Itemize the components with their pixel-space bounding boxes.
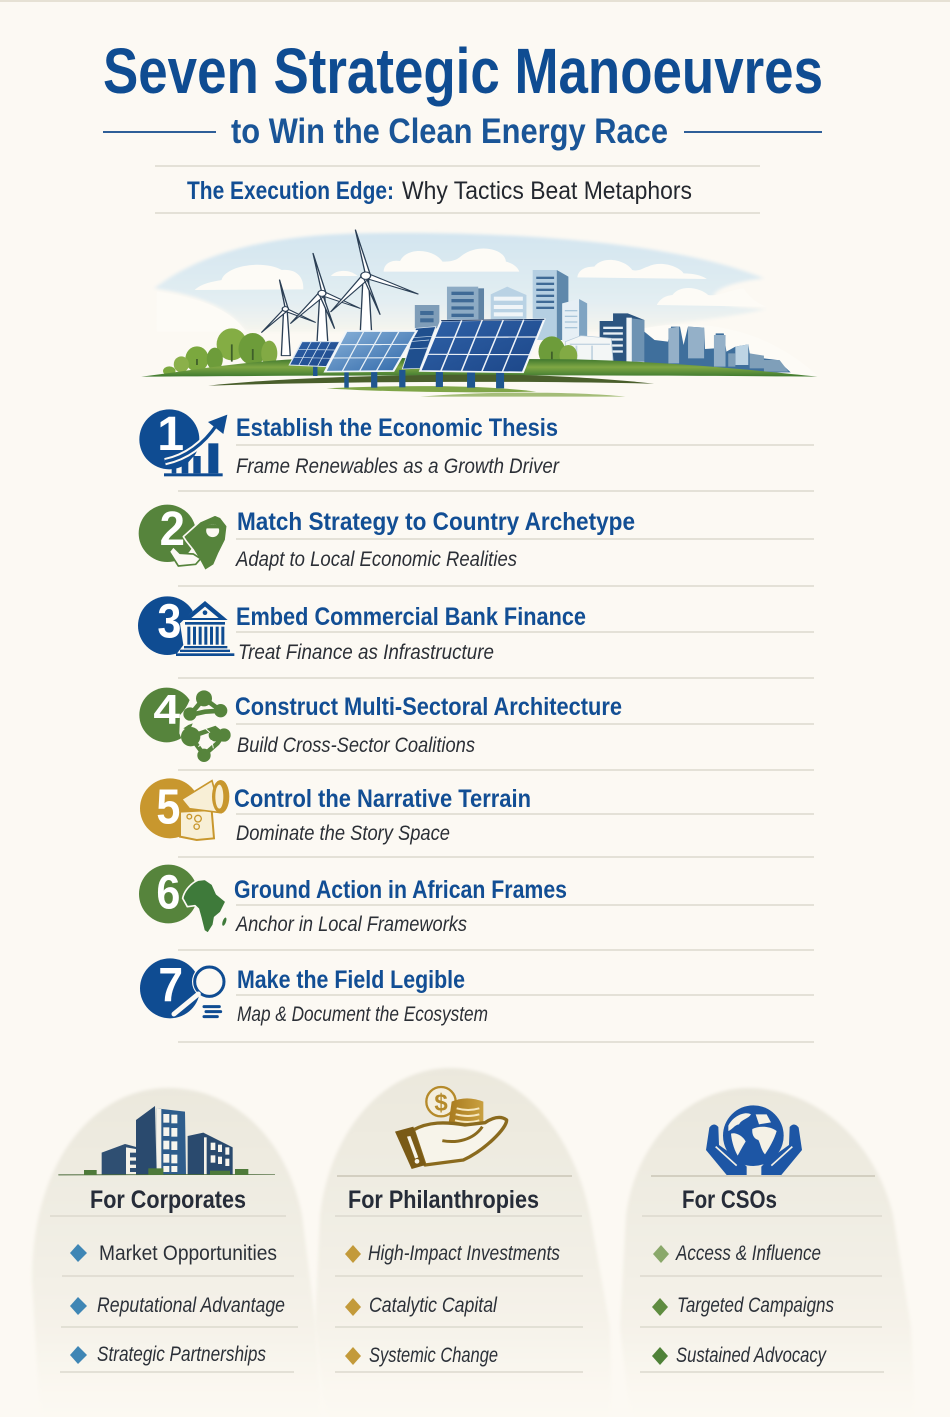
subheading 6: Anchor in Local Frameworks	[234, 913, 467, 936]
step 1	[139, 407, 814, 478]
icon: megaphone and money: 5	[156, 779, 180, 834]
item: systemic change: Systemic Change	[369, 1344, 498, 1367]
item: sustained advocacy: Sustained Advocacy	[676, 1344, 827, 1367]
icon: Africa map	[139, 865, 227, 933]
buildings	[415, 270, 791, 372]
step 3	[138, 594, 814, 664]
tagline: The Execution Edge:	[187, 177, 394, 205]
item: systemic change	[345, 1344, 498, 1367]
heading: for philanthropies: For Philanthropies	[348, 1186, 539, 1214]
icon: connected network: 4	[153, 686, 180, 733]
step 5	[140, 778, 814, 845]
item: market opportunities: Market Opportunities	[99, 1242, 277, 1265]
step 7	[140, 958, 814, 1026]
heading: for csos: For CSOs	[682, 1186, 777, 1214]
hero illustration: wind turbines, solar panels and city skyline	[141, 230, 818, 397]
heading 1: Establish the Economic Thesis	[236, 414, 558, 442]
heading 5: Control the Narrative Terrain	[234, 785, 531, 813]
panel: for csos	[620, 1088, 915, 1417]
panel: for philanthropies	[315, 1068, 612, 1417]
icon: hands holding globe	[706, 1105, 802, 1177]
icon: megaphone and money	[140, 778, 229, 840]
step 6	[139, 865, 814, 936]
subheading 4: Build Cross-Sector Coalitions	[237, 734, 475, 757]
item: high-impact investments: High-Impact Investments	[368, 1242, 560, 1265]
clouds	[157, 248, 818, 376]
item: reputational advantage: Reputational Advantage	[97, 1294, 285, 1317]
trees	[163, 328, 577, 376]
heading: for corporates: For Corporates	[90, 1186, 246, 1214]
wind turbines	[262, 230, 418, 356]
icon: bank: 3	[157, 594, 181, 648]
heading 6: Ground Action in African Frames	[234, 876, 567, 904]
item: catalytic capital: Catalytic Capital	[369, 1294, 498, 1317]
heading 2: Match Strategy to Country Archetype	[237, 508, 635, 536]
tagline	[187, 177, 692, 205]
subheading 7: Map & Document the Ecosystem	[237, 1003, 488, 1026]
subheading 3: Treat Finance as Infrastructure	[238, 641, 494, 664]
step 2	[139, 502, 814, 571]
icon: hand holding coins: $	[434, 1090, 448, 1117]
title: Seven Strategic Manoeuvres	[103, 35, 823, 107]
icon: connected network	[139, 686, 231, 762]
heading 4: Construct Multi-Sectoral Architecture	[235, 693, 622, 721]
icon: bank	[138, 594, 235, 658]
icon: office buildings	[58, 1106, 275, 1175]
subheading 5: Dominate the Story Space	[236, 822, 450, 845]
icon: growth chart	[139, 407, 227, 477]
subtitle: to Win the Clean Energy Race	[231, 112, 668, 151]
icon: magnifying glass	[140, 958, 227, 1022]
icon: growth chart: 1	[157, 407, 184, 461]
icon: Africa map: 6	[156, 866, 180, 920]
icon: local map and hand	[139, 502, 227, 571]
subheading 1: Frame Renewables as a Growth Driver	[236, 455, 560, 478]
subheading 2: Adapt to Local Economic Realities	[234, 548, 517, 571]
tagline: Why Tactics Beat Metaphors	[402, 177, 692, 205]
icon: hand holding coins	[395, 1087, 507, 1169]
sky	[155, 233, 766, 332]
heading 7: Make the Field Legible	[237, 966, 465, 994]
step 4	[139, 686, 814, 762]
item: strategic partnerships: Strategic Partnerships	[97, 1343, 266, 1366]
panel: for corporates	[32, 1088, 322, 1417]
icon: magnifying glass: 7	[158, 959, 183, 1013]
ground	[141, 358, 818, 377]
item: targeted campaigns: Targeted Campaigns	[677, 1294, 834, 1317]
solar panels	[289, 319, 544, 388]
icon: local map and hand: 2	[160, 502, 185, 556]
heading 3: Embed Commercial Bank Finance	[236, 603, 586, 631]
item: access and influence: Access & Influence	[674, 1242, 821, 1265]
